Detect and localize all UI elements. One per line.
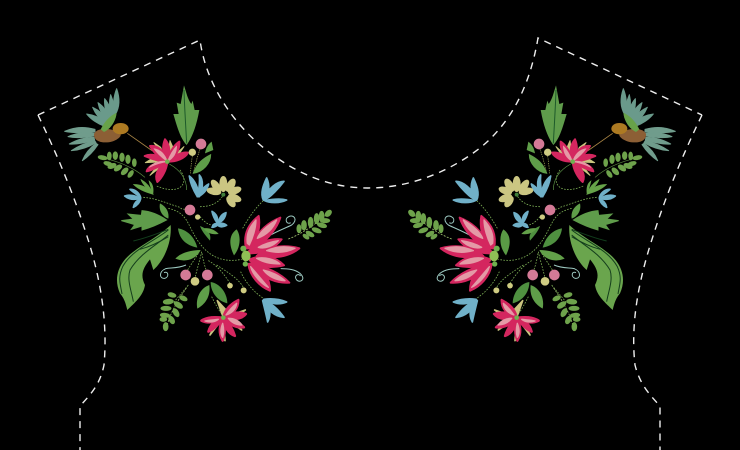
floral embroidery: right side mirrored (407, 85, 675, 341)
pink flower near bird (145, 139, 188, 182)
hummingbird green wing (101, 113, 117, 132)
main cluster (117, 170, 333, 341)
pink bead (196, 139, 206, 149)
small fern under bird (98, 152, 145, 178)
small leaves (160, 203, 169, 219)
hummingbird tail feathers (65, 127, 98, 161)
dotted stems (143, 170, 263, 315)
yellow bead (189, 149, 196, 156)
hummingbird head (113, 123, 129, 134)
leaf right of flower (193, 155, 211, 173)
hummingbird body (94, 129, 121, 142)
lower left fern (160, 287, 188, 331)
khaki daisy (207, 177, 242, 208)
hummingbird beak (127, 133, 152, 151)
right fern (288, 209, 333, 240)
hummingbird wing feathers (87, 89, 119, 126)
curl tendrils (160, 216, 303, 281)
left notched leaf (121, 211, 167, 230)
floral embroidery: left side (65, 85, 333, 341)
top feather leaf (173, 85, 199, 145)
hummingbird and top cluster (65, 85, 213, 190)
main lotus flower (240, 216, 299, 291)
bottom pink flower (201, 300, 246, 341)
big feathered leaf (117, 225, 171, 310)
blue flowers (125, 175, 287, 322)
stems top (169, 149, 200, 190)
upper small leaf (205, 142, 213, 153)
beads (180, 205, 247, 293)
